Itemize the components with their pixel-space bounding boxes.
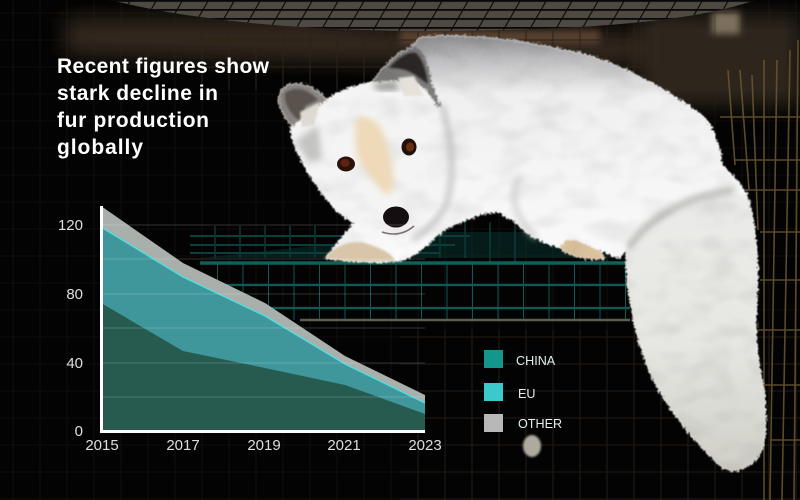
title: Recent figures show (57, 55, 270, 78)
area: EU (101, 227, 425, 431)
fox hind paw (560, 240, 605, 259)
fox face details (285, 53, 735, 262)
nose (383, 206, 409, 228)
legend (484, 350, 562, 432)
x axis labels: 2019 (247, 437, 281, 454)
x axis labels (85, 437, 442, 454)
axes (102, 206, 425, 432)
x axis labels: 2015 (85, 437, 119, 454)
teal platform (190, 222, 630, 320)
title: fur production (57, 109, 209, 132)
fox tail (626, 191, 766, 471)
y axis labels: 40 (66, 355, 83, 372)
warm wall behind cage (65, 18, 700, 70)
fox body (325, 36, 747, 262)
x axis labels: 2021 (327, 437, 361, 454)
fox left ear (279, 84, 335, 138)
y axis labels: 80 (66, 286, 83, 303)
y axis labels: 120 (58, 217, 83, 234)
fox head (290, 81, 452, 238)
gridlines (101, 225, 425, 397)
line: EU top edge (101, 227, 425, 403)
y axis labels (58, 217, 83, 440)
area chart (58, 206, 442, 454)
front paw (325, 242, 395, 262)
right eye (402, 138, 416, 156)
legend: other: OTHER (518, 417, 562, 431)
fox right ear (372, 46, 442, 108)
fox illustration (279, 36, 766, 471)
x axis labels: 2023 (408, 437, 442, 454)
top wire cage (110, 0, 755, 31)
legend: EU: EU (518, 387, 536, 401)
x axis labels: 2017 (166, 437, 200, 454)
title: stark decline in (57, 82, 218, 105)
y axis labels: 0 (75, 423, 83, 440)
area: China (101, 303, 425, 431)
left eye (337, 156, 355, 172)
legend: China: CHINA (516, 354, 556, 368)
area: other (101, 206, 425, 431)
right wire cage (720, 40, 800, 500)
title: globally (57, 136, 143, 159)
